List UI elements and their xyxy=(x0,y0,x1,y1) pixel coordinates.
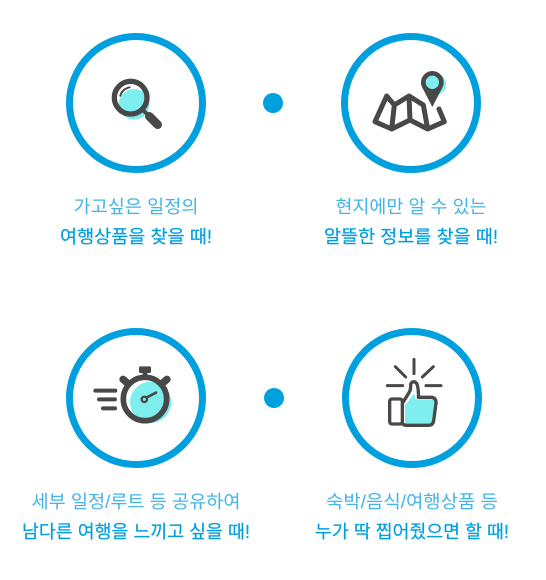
panel: search travel products xyxy=(60,36,212,247)
text: recommendations caption xyxy=(315,492,509,542)
panel: recommendations xyxy=(315,332,509,542)
text: recommendations caption: 누가 딱 찝어줬으면 할 때! xyxy=(315,522,509,542)
circle ring: search xyxy=(70,36,202,170)
icon: magnifying glass xyxy=(114,81,158,125)
panel: share routes xyxy=(22,332,250,542)
text: share routes caption: 남다른 여행을 느끼고 싶을 때! xyxy=(22,522,250,542)
text: share routes caption xyxy=(22,492,250,542)
text: search caption: 가고싶은 일정의 xyxy=(74,197,198,217)
bullet dot: bottom xyxy=(264,388,284,408)
text: local information caption: 알뜰한 정보를 찾을 때! xyxy=(324,227,498,247)
text: share routes caption: 세부 일정/루트 등 공유하여 xyxy=(32,492,240,512)
icon: stopwatch xyxy=(95,366,171,423)
circle ring: map xyxy=(344,36,478,170)
circle ring: thumbs up xyxy=(346,332,478,464)
text: local information caption: 현지에만 알 수 있는 xyxy=(336,197,486,217)
panel: local information xyxy=(324,36,498,247)
bullet dot: top xyxy=(263,93,283,113)
circle ring: stopwatch xyxy=(70,332,202,464)
icon: thumbs up xyxy=(387,359,441,425)
text: recommendations caption: 숙박/음식/여행상품 등 xyxy=(326,492,498,512)
icon: map with pin xyxy=(375,73,446,129)
text: search caption xyxy=(60,197,212,247)
text: search caption: 여행상품을 찾을 때! xyxy=(60,227,212,247)
text: local information caption xyxy=(324,197,498,247)
